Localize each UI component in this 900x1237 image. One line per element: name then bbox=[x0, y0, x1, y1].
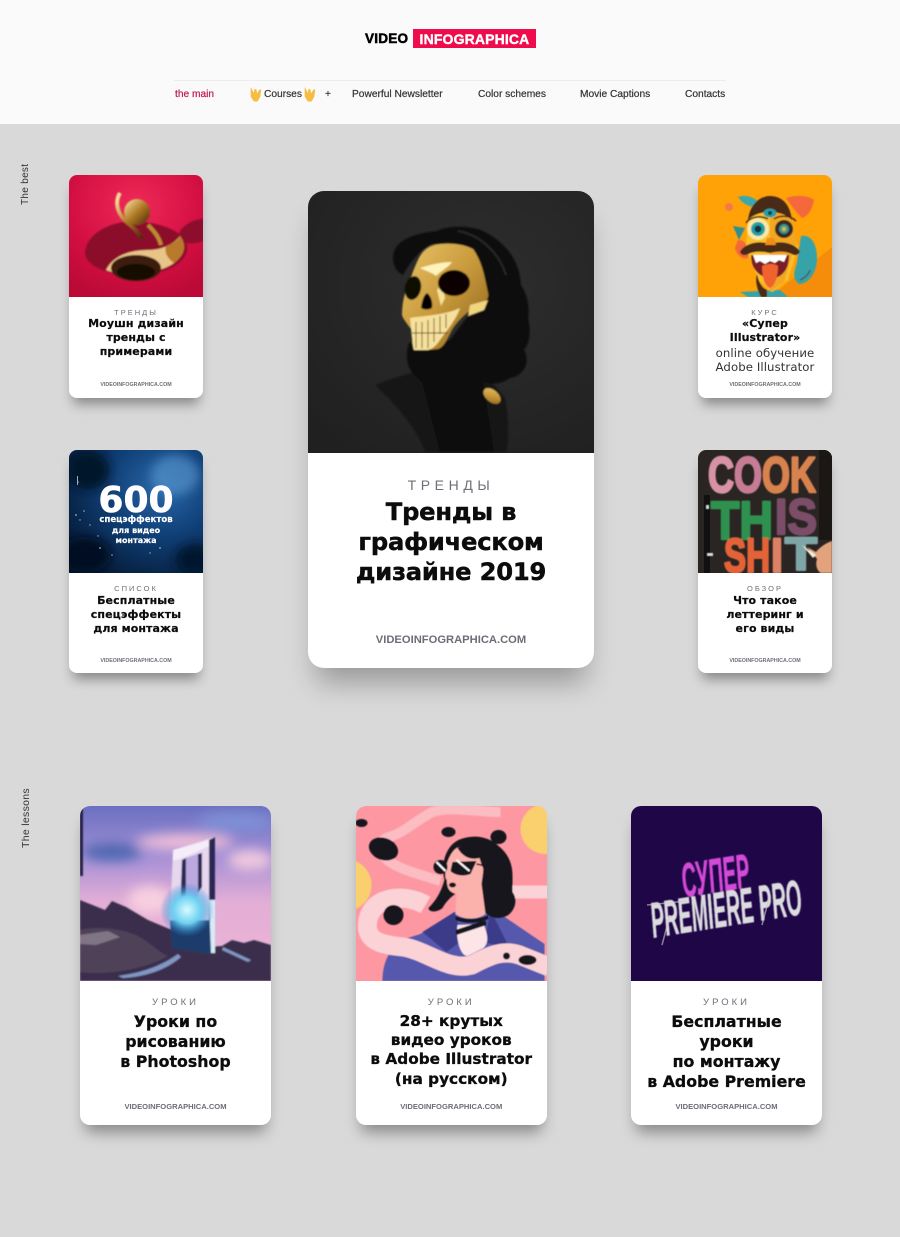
card: photoshop painting lessons bbox=[80, 806, 271, 1125]
card text bbox=[647, 997, 806, 1111]
headline 600: для видео bbox=[112, 526, 161, 535]
title: Бесплатные bbox=[97, 594, 175, 607]
site footer: VIDEOINFOGRAPHICA.COM bbox=[100, 382, 172, 388]
title bbox=[88, 317, 184, 358]
nav: courses: + bbox=[325, 89, 331, 100]
cap bbox=[393, 227, 529, 330]
title: видео уроков bbox=[391, 1031, 512, 1049]
nav: courses bbox=[250, 87, 331, 102]
nav: courses: Courses bbox=[264, 89, 302, 100]
jacket bbox=[382, 910, 544, 981]
sunglasses bbox=[433, 860, 447, 874]
title: по монтажу bbox=[673, 1052, 780, 1071]
headline 600: 600 bbox=[98, 480, 174, 521]
side label: the lessons: The lessons bbox=[20, 788, 32, 848]
category label: ТРЕНДЫ bbox=[114, 308, 158, 317]
category label: УРОКИ bbox=[152, 997, 199, 1008]
title bbox=[726, 594, 804, 635]
beard and hair bbox=[407, 250, 530, 391]
card: premiere lessons bbox=[631, 806, 822, 1125]
card: lettering overview bbox=[698, 450, 832, 673]
mustache bbox=[740, 242, 800, 255]
title bbox=[370, 1012, 532, 1088]
image: food lettering: TH bbox=[711, 491, 773, 551]
site footer: VIDEOINFOGRAPHICA.COM bbox=[675, 1102, 778, 1111]
title bbox=[716, 317, 814, 374]
title: спецэффекты bbox=[91, 608, 181, 621]
image: food lettering: IS bbox=[775, 489, 817, 545]
title: Что такое bbox=[733, 594, 797, 607]
hair bbox=[428, 837, 515, 918]
title: леттеринг и bbox=[726, 608, 804, 621]
face bbox=[746, 196, 798, 292]
site footer: VIDEOINFOGRAPHICA.COM bbox=[100, 658, 172, 664]
headline 600 bbox=[98, 480, 174, 545]
title bbox=[91, 594, 181, 635]
image: food lettering bbox=[698, 450, 832, 573]
teeth bbox=[410, 308, 460, 350]
image: blue smoke with 600 headline bbox=[69, 450, 203, 573]
image: girl with sunglasses illustration bbox=[356, 806, 547, 981]
title: для монтажа bbox=[93, 622, 179, 635]
title: в Adobe Premiere bbox=[647, 1072, 806, 1091]
title: в Adobe Illustrator bbox=[370, 1050, 532, 1068]
title bbox=[356, 498, 546, 586]
card text bbox=[716, 308, 814, 388]
title: его виды bbox=[736, 622, 794, 635]
title: Моушн дизайн bbox=[88, 317, 184, 330]
title bbox=[120, 1012, 231, 1071]
header band bbox=[0, 0, 900, 124]
title: уроки bbox=[699, 1032, 754, 1051]
site footer: VIDEOINFOGRAPHICA.COM bbox=[729, 382, 801, 388]
logo word VIDEO: VIDEO bbox=[365, 31, 408, 46]
card: featured graphic design trends bbox=[308, 191, 594, 668]
card text bbox=[91, 584, 181, 664]
title: тренды с bbox=[106, 331, 166, 344]
image: red scene with gold sphere bbox=[69, 175, 203, 297]
gold skull bbox=[402, 244, 488, 350]
title: online обучение bbox=[716, 346, 814, 360]
category label: ТРЕНДЫ bbox=[408, 477, 494, 493]
nav: powerful newsletter: Powerful Newsletter bbox=[352, 89, 443, 100]
image: golden skull bust bbox=[308, 191, 594, 453]
site footer: VIDEOINFOGRAPHICA.COM bbox=[376, 634, 526, 646]
gold pin bbox=[480, 385, 504, 407]
card: 600 effects list bbox=[69, 450, 203, 673]
site footer: VIDEOINFOGRAPHICA.COM bbox=[400, 1102, 502, 1111]
card: illustrator video lessons bbox=[356, 806, 546, 1125]
title: Бесплатные bbox=[671, 1012, 782, 1031]
floating blobs bbox=[365, 834, 401, 864]
title: 28+ крутых bbox=[400, 1012, 503, 1030]
title bbox=[647, 1012, 806, 1091]
title: Тренды в bbox=[386, 498, 516, 526]
category label: УРОКИ bbox=[703, 997, 750, 1008]
title: в Photoshop bbox=[120, 1052, 231, 1071]
front ribbon bbox=[367, 898, 549, 967]
mouth and tongue bbox=[751, 255, 789, 279]
title: графическом bbox=[358, 528, 544, 556]
side label: the best: The best bbox=[20, 164, 31, 205]
title: «Супер bbox=[742, 317, 788, 330]
logo word INFOGRAPHICA: INFOGRAPHICA bbox=[420, 31, 529, 47]
card: motion design trends bbox=[69, 175, 203, 398]
category label: ОБЗОР bbox=[747, 584, 783, 593]
card text bbox=[356, 477, 546, 646]
bust shoulders bbox=[375, 372, 508, 452]
title: Adobe Illustrator bbox=[716, 360, 814, 374]
card text bbox=[88, 308, 184, 388]
title: дизайне 2019 bbox=[356, 558, 546, 586]
card: super illustrator course bbox=[698, 175, 832, 398]
site footer: VIDEOINFOGRAPHICA.COM bbox=[124, 1102, 227, 1111]
eye sockets bbox=[438, 270, 470, 296]
image: orange tribal mask bbox=[698, 175, 832, 297]
category label: УРОКИ bbox=[428, 997, 475, 1008]
nav: movie captions: Movie Captions bbox=[580, 89, 650, 100]
nav: color schemes: Color schemes bbox=[478, 89, 546, 100]
title: рисованию bbox=[125, 1032, 226, 1051]
site footer: VIDEOINFOGRAPHICA.COM bbox=[729, 658, 801, 664]
title: Illustrator» bbox=[730, 331, 800, 344]
image: glowing portal landscape bbox=[80, 806, 271, 981]
title: (на русском) bbox=[395, 1070, 508, 1088]
headline 600: монтажа bbox=[116, 536, 156, 545]
title: Уроки по bbox=[134, 1012, 217, 1031]
nav: contacts: Contacts bbox=[685, 89, 725, 100]
category label: СПИСОК bbox=[114, 584, 158, 593]
category label: КУРС bbox=[751, 308, 779, 317]
background ribbons bbox=[380, 809, 500, 881]
face and neck bbox=[445, 846, 485, 918]
card text bbox=[370, 997, 532, 1111]
card text bbox=[120, 997, 231, 1111]
title: примерами bbox=[100, 345, 172, 358]
nav: the main: the main bbox=[175, 89, 214, 100]
headline 600: спецэффектов bbox=[99, 515, 173, 525]
choker bbox=[455, 915, 488, 935]
image: super premiere pro logo bbox=[631, 806, 822, 981]
logo bbox=[364, 29, 536, 48]
portal bbox=[170, 837, 215, 953]
card text bbox=[726, 584, 804, 664]
